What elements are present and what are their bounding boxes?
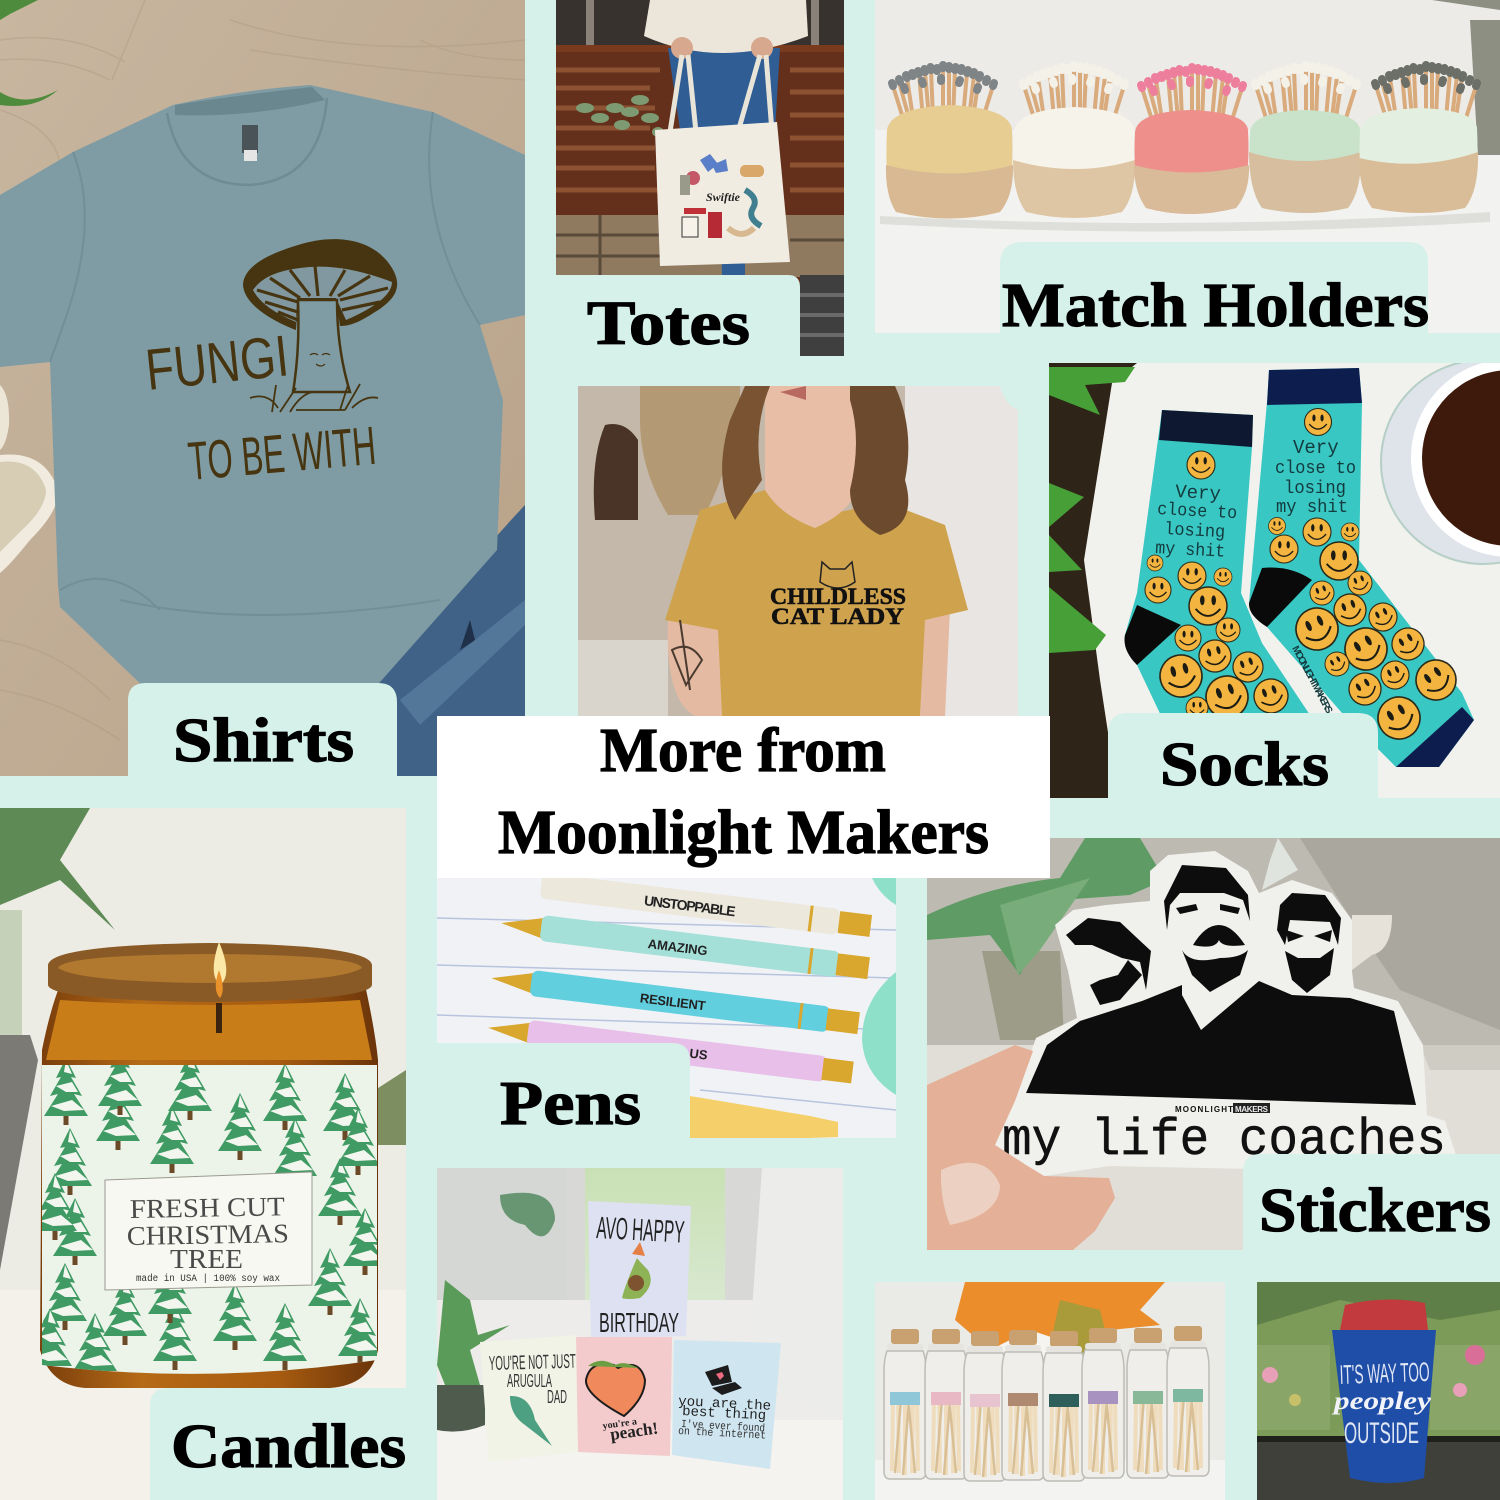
title block: [437, 716, 1050, 878]
pen: resilient: [492, 970, 860, 1034]
sticker figure: centre head: [1164, 865, 1250, 992]
left sock: Very: [1175, 481, 1221, 505]
left sock: [1124, 410, 1309, 713]
candle name box: made in USA | 100% soy wax: [136, 1273, 280, 1285]
panel: pens photo: [437, 873, 896, 1138]
sticker: MAKERS: [1235, 1105, 1269, 1114]
plant leaves and table: [1049, 363, 1137, 798]
title block: More from: [600, 717, 886, 785]
label: socks: [1108, 713, 1378, 799]
card: arugula dad: YOU'RE NOT JUST: [489, 1351, 576, 1375]
candle name box: TREE: [170, 1244, 243, 1274]
pen: unstoppable: [540, 878, 872, 937]
koozie can: peopley: [1332, 1388, 1432, 1415]
pen: amazing: AMAZING: [647, 936, 708, 958]
koozie can: [1332, 1299, 1436, 1483]
mushroom graphic: [243, 239, 397, 412]
panel: shirts photo: [0, 0, 525, 776]
coffee cup and saucer: [1381, 359, 1500, 564]
candle name box: FRESH CUT: [130, 1191, 286, 1224]
arm tattoo: [672, 620, 702, 690]
icon: holder tan: [886, 65, 1013, 218]
card: you're a peach: peach!: [609, 1418, 659, 1444]
right sock: [1249, 368, 1474, 767]
koozie can: OUTSIDE: [1344, 1417, 1419, 1450]
card: you are the best thing: on the internet: [678, 1426, 766, 1443]
label: pens: Pens: [500, 1070, 641, 1138]
label: candles: [150, 1388, 437, 1500]
woman arms: [668, 610, 950, 716]
candle jar: [40, 942, 378, 1388]
sticker figure: right head: [1277, 893, 1341, 993]
panel: totes photo: [556, 0, 844, 356]
person: sweater and jeans: [644, 0, 808, 275]
icon: cat: [820, 562, 855, 588]
pen: yellow: [690, 1096, 838, 1138]
card: arugula dad: [480, 1335, 578, 1462]
mustard t-shirt: [665, 490, 968, 716]
card: you are the best thing: best thing: [682, 1404, 766, 1424]
label: shirts: Shirts: [173, 707, 354, 775]
illustration: tote bag: Swiftie: [706, 190, 741, 204]
sticker caption: my life coaches: [1002, 1111, 1446, 1170]
right sock: my shit: [1276, 498, 1348, 518]
illustration: t-shirt: [0, 85, 525, 690]
woman: neck and hair: [722, 386, 908, 535]
label: match holders: Match Holders: [1002, 272, 1429, 340]
card: you are the best thing: I've ever found: [681, 1419, 765, 1435]
card: avo happy birthday: BIRTHDAY: [599, 1307, 679, 1338]
card: you're a peach: [576, 1337, 672, 1456]
pen: lilac: US: [689, 1046, 709, 1063]
card: you are the best thing: [672, 1340, 781, 1469]
icon: holder white: [1013, 65, 1135, 218]
card: you are the best thing: you are the: [678, 1394, 771, 1415]
flowers: [955, 1282, 1165, 1360]
label: stickers: Stickers: [1259, 1177, 1491, 1245]
raffia mirror: [640, 386, 740, 515]
label: candles: Candles: [171, 1413, 406, 1481]
card: avo happy birthday: [588, 1201, 691, 1339]
candle name box: CHRISTMAS: [127, 1218, 289, 1251]
left sock: losing: [1164, 520, 1226, 543]
panel: match holders photo: [875, 0, 1500, 333]
icon: leaves: [0, 0, 58, 106]
shirt text: TO BE WITH: TO BE WITH: [186, 416, 378, 492]
plant: [437, 1280, 510, 1385]
sticker: [995, 851, 1456, 1176]
card: arugula dad: DAD: [547, 1387, 567, 1407]
shirt text: FUNGI: FUNGI: [143, 323, 292, 403]
label: stickers: [1243, 1154, 1500, 1250]
panel: candles photo: [0, 808, 406, 1500]
right sock: losing: [1284, 479, 1346, 499]
icon: holder pale: [1359, 65, 1478, 213]
plant and pot: [927, 838, 1165, 1040]
candle label with trees: [28, 1048, 387, 1380]
panel: koozie photo: [1257, 1282, 1500, 1500]
panel: childless cat lady photo: [578, 386, 1018, 716]
illustration: tote bag: [655, 122, 790, 266]
title block: Moonlight Makers: [498, 799, 989, 867]
pen: lilac: [488, 1020, 854, 1084]
label: pens: [437, 1043, 690, 1138]
card: arugula dad: ARUGULA: [507, 1371, 552, 1391]
shirt text: CAT LADY: CAT LADY: [771, 604, 904, 629]
icon: holder mint: [1249, 65, 1361, 213]
panel: cards photo: [437, 1168, 843, 1500]
label: shirts: [128, 683, 397, 776]
right sock: Very: [1293, 437, 1339, 459]
coloured match heads: [890, 1389, 1203, 1407]
label: totes: [556, 275, 800, 358]
pen: resilient: RESILIENT: [639, 990, 707, 1013]
jeans: [373, 505, 525, 776]
panel: match jars photo: [875, 1282, 1225, 1500]
label: match holders: [1000, 242, 1429, 340]
right sock: close to: [1275, 459, 1356, 479]
icon: sneakers: [0, 385, 58, 573]
card: you're a peach: you're a: [602, 1416, 638, 1432]
panel: socks photo: [1049, 359, 1500, 798]
panel: stickers photo: [927, 838, 1500, 1250]
sticker figures: shirts: [1026, 981, 1416, 1105]
sticker figure: left head: [1066, 918, 1151, 1005]
card: avo happy birthday: AVO HAPPY: [596, 1210, 685, 1250]
sticker logo: MOONLIGHT: [1175, 1105, 1233, 1114]
candle name box: [105, 1172, 312, 1290]
shirt text: CHILDLESS: CHILDLESS: [770, 584, 906, 609]
jars row: [884, 1326, 1209, 1481]
icon: holder pink: [1134, 67, 1249, 214]
label: totes: Totes: [587, 290, 750, 358]
left sock: my shit: [1155, 539, 1226, 563]
hand: [927, 1045, 1115, 1250]
label: socks: Socks: [1160, 731, 1329, 799]
pen: unstoppable: UNSTOPPABLE: [643, 892, 736, 919]
left sock: close to: [1157, 500, 1238, 524]
right sock: MOONLIGHT MAKERS: [1289, 644, 1334, 716]
pen: amazing: [502, 916, 870, 980]
icon: eucalyptus sprig: [576, 95, 664, 137]
